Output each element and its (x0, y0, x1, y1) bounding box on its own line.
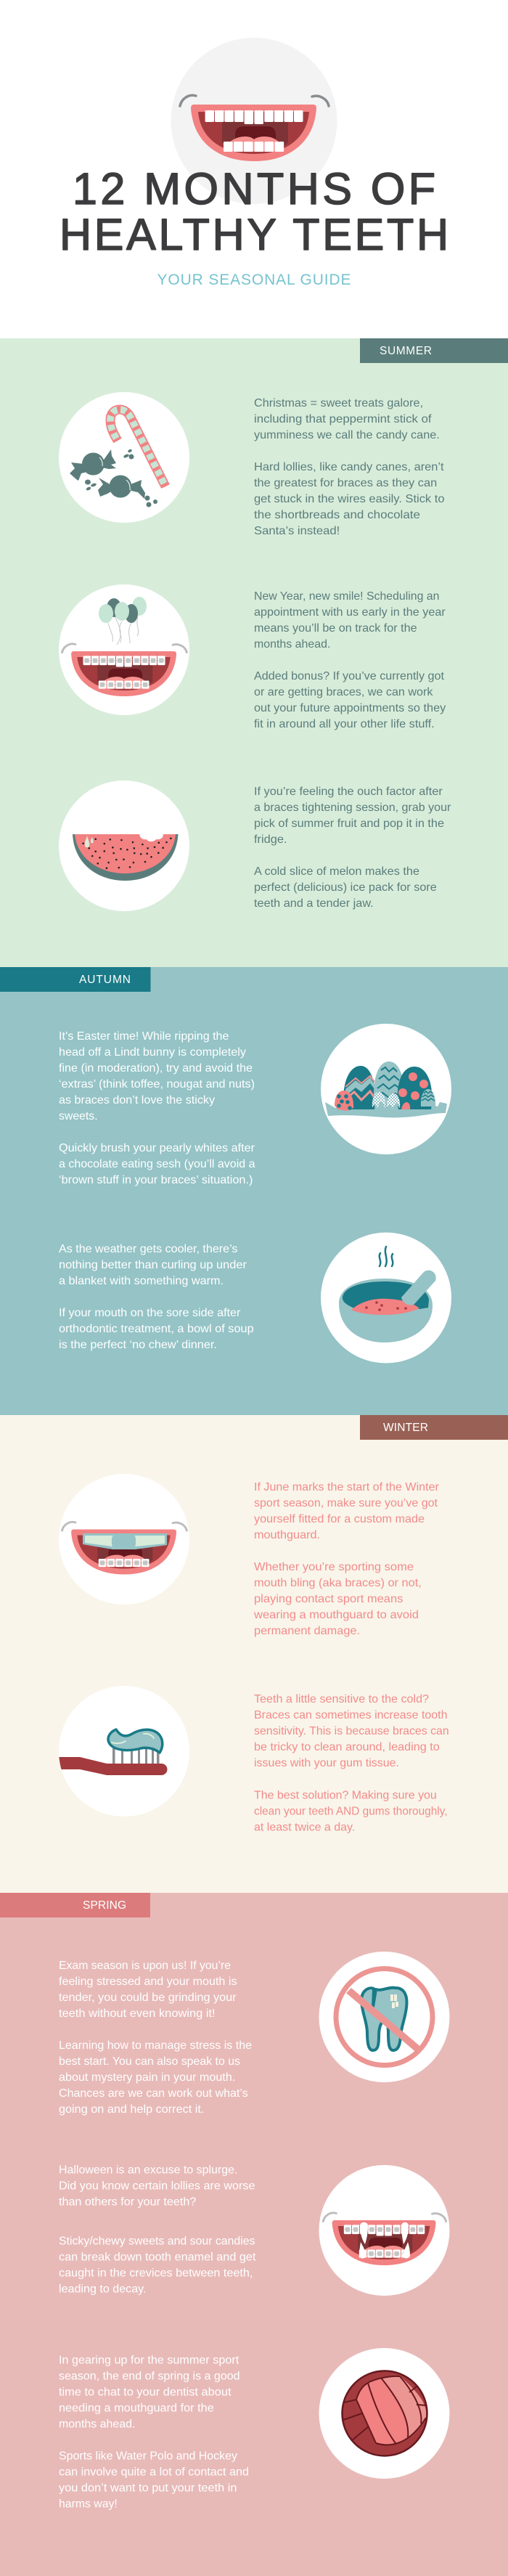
text: candy cane: yumminess we call the candy cane. (254, 429, 440, 441)
text: new year (254, 590, 446, 730)
icon: easter eggs (321, 1024, 451, 1154)
text: exam stress: Chances are we can work out what’s (59, 2087, 248, 2100)
title: HEALTHY TEETH (60, 210, 448, 259)
text: easter: ‘extras’ (think toffee, nougat and nuts) (59, 1078, 255, 1091)
text: halloween: can break down tooth enamel and get (59, 2251, 256, 2264)
text: candy cane: Hard lollies, like candy canes, aren’t (254, 461, 444, 473)
text: exam stress: best start. You can also speak to us (59, 2055, 240, 2068)
panel: summer (0, 338, 508, 967)
icon: candy cane and sweets (59, 392, 189, 523)
panel: winter (0, 1415, 508, 1893)
text: summer fruit: perfect (delicious) ice pack for sore (254, 881, 437, 894)
text: sensitive teeth: issues with your gum tissue. (254, 1757, 399, 1769)
text: mouthguard for sport: time to chat to your dentist about (59, 2387, 232, 2399)
heading: winter tag: WINTER (383, 1422, 428, 1434)
text: halloween: leading to decay. (59, 2283, 147, 2296)
text: summer fruit: fridge. (254, 833, 287, 846)
text: mouthguard: wearing a mouthguard to avoid (253, 1609, 419, 1621)
text: mouthguard: yourself fitted for a custom made (254, 1513, 425, 1525)
text: mouthguard for sport: harms way! (59, 2498, 118, 2511)
text: candy cane: the shortbreads and chocolate (254, 509, 420, 521)
icon: volleyball (319, 2348, 450, 2479)
text: new year: out your future appointments so they (254, 702, 446, 714)
text: soup: As the weather gets cooler, there’s (59, 1243, 237, 1255)
text: new year: or are getting braces, we can work (254, 686, 433, 698)
heading: spring tag: SPRING (83, 1899, 126, 1912)
text: exam stress: feeling stressed and your mouth is (59, 1976, 237, 1988)
text: soup (59, 1243, 254, 1351)
text: easter (59, 1030, 255, 1186)
text: summer fruit: a braces tightening session, grab your (254, 802, 451, 814)
text: easter: as braces don’t love the sticky (59, 1094, 215, 1106)
text: new year: New Year, new smile! Scheduling an (254, 590, 439, 603)
text: candy cane: including that peppermint stick of (254, 413, 432, 425)
text: exam stress: about mystery pain in your mouth. (59, 2071, 235, 2084)
text: halloween: than others for your teeth? (59, 2196, 196, 2209)
text: mouthguard: permanent damage. (254, 1625, 360, 1637)
text: exam stress: Exam season is upon us! If you’re (59, 1960, 231, 1972)
text: sensitive teeth: The best solution? Making sure you (254, 1789, 437, 1802)
text: candy cane: get stuck in the wires easily. Stick to (254, 493, 445, 505)
subtitle: YOUR SEASONAL GUIDE (157, 272, 351, 288)
text: mouthguard: mouthguard. (254, 1529, 320, 1541)
text: summer fruit: If you’re feeling the ouch factor after (254, 786, 443, 798)
icon: watermelon slice (59, 780, 189, 911)
heading: spring tag (0, 1893, 150, 1917)
text: exam stress: Learning how to manage stress is the (59, 2039, 252, 2052)
text: summer fruit: A cold slice of melon makes the (254, 865, 419, 878)
text: easter: head off a Lindt bunny is completely (59, 1046, 246, 1059)
text: halloween: Halloween is an excuse to splurge. (59, 2164, 237, 2177)
text: new year: fit in around all your other life stuff. (254, 718, 435, 730)
text: new year: means you’ll be on track for the (254, 622, 417, 635)
heading: winter tag (360, 1415, 508, 1440)
header background (0, 0, 508, 338)
text: sensitive teeth: Teeth a little sensitive to the cold? (254, 1693, 429, 1705)
icon: mouthguard smile (59, 1474, 189, 1605)
text: sensitive teeth (254, 1693, 449, 1834)
text: halloween: Sticky/chewy sweets and sour candies (59, 2235, 255, 2248)
text: mouthguard for sport: needing a mouthguard for the (59, 2402, 214, 2415)
text: mouthguard: Whether you’re sporting some (254, 1561, 414, 1573)
title (60, 164, 448, 259)
text: sensitive teeth: clean your teeth AND gums thoroughly, (254, 1805, 447, 1818)
icon: bowl of soup (321, 1233, 451, 1364)
text: halloween: caught in the crevices between teeth, (59, 2267, 253, 2280)
text: easter: Quickly brush your pearly whites after (59, 1142, 255, 1154)
text: mouthguard: playing contact sport means (254, 1593, 403, 1605)
text: candy cane: Christmas = sweet treats galore, (254, 397, 423, 409)
text: exam stress: teeth without even knowing it! (59, 2008, 216, 2020)
text: mouthguard for sport: can involve quite a lot of contact and (59, 2466, 249, 2479)
text: summer fruit: teeth and a tender jaw. (254, 897, 374, 910)
text: mouthguard: If June marks the start of the Winter (254, 1481, 440, 1493)
text: sensitive teeth: be tricky to clean around, leading to (254, 1741, 440, 1753)
heading: summer tag: SUMMER (380, 345, 432, 357)
text: candy cane: the greatest for braces as they can (254, 477, 437, 489)
panel: autumn (0, 967, 508, 1415)
text: halloween: Did you know certain lollies are worse (59, 2180, 255, 2193)
text: exam stress: tender, you could be grinding your (59, 1992, 237, 2004)
text: sensitive teeth: Braces can sometimes increase tooth (254, 1709, 447, 1721)
text: mouthguard for sport: In gearing up for the summer sport (59, 2355, 239, 2367)
text: soup: orthodontic treatment, a bowl of soup (59, 1323, 254, 1335)
text: mouthguard for sport: Sports like Water Polo and Hockey (59, 2450, 237, 2463)
text: easter: ‘brown stuff in your braces’ situation.) (59, 1174, 253, 1186)
text: new year: appointment with us early in the year (254, 606, 446, 619)
text: easter: fine (in moderation), try and avoid the (59, 1062, 253, 1075)
text: summer fruit: pick of summer fruit and pop it in the (254, 818, 444, 830)
heading: autumn tag: AUTUMN (79, 974, 131, 986)
text: mouthguard: sport season, make sure you’ve got (254, 1497, 438, 1509)
text: easter: sweets. (59, 1110, 98, 1122)
text: halloween (59, 2164, 256, 2296)
page header (0, 0, 508, 338)
icon: balloons and braces smile (59, 584, 189, 715)
title: 12 MONTHS OF (73, 164, 435, 213)
text: mouthguard for sport: months ahead. (59, 2418, 135, 2431)
text: easter: It’s Easter time! While ripping the (59, 1030, 229, 1043)
text: exam stress (59, 1960, 252, 2116)
text: mouthguard for sport: you don’t want to put your teeth in (59, 2482, 237, 2495)
text: new year: Added bonus? If you’ve currently got (254, 670, 445, 682)
text: mouthguard for sport: season, the end of spring is a good (59, 2371, 240, 2383)
panel: spring (0, 1893, 508, 2576)
text: easter: a chocolate eating sesh (you’ll avoid a (59, 1158, 255, 1170)
text: summer fruit (254, 786, 451, 910)
text: candy cane: Santa’s instead! (254, 525, 340, 537)
text: soup: is the perfect ‘no chew’ dinner. (59, 1339, 217, 1351)
text: soup: If your mouth on the sore side after (59, 1307, 241, 1319)
text: new year: months ahead. (254, 638, 330, 651)
icon: laughing mouth (171, 38, 337, 204)
text: soup: nothing better than curling up under (59, 1259, 247, 1271)
icon: no tooth grinding (319, 1952, 450, 2082)
text: soup: a blanket with something warm. (59, 1275, 224, 1287)
text: mouthguard for sport (59, 2355, 249, 2511)
text: sensitive teeth: sensitivity. This is because braces can (254, 1725, 449, 1737)
text: mouthguard: mouth bling (aka braces) or not, (254, 1577, 422, 1589)
heading: autumn tag (0, 967, 151, 992)
text: mouthguard (253, 1481, 440, 1637)
text: sensitive teeth: at least twice a day. (254, 1821, 355, 1834)
icon: vampire smile (319, 2165, 450, 2296)
text: exam stress: going on and help correct it. (59, 2103, 204, 2116)
heading: summer tag (360, 338, 508, 363)
text: candy cane (254, 397, 445, 537)
icon: toothbrush (59, 1686, 189, 1817)
